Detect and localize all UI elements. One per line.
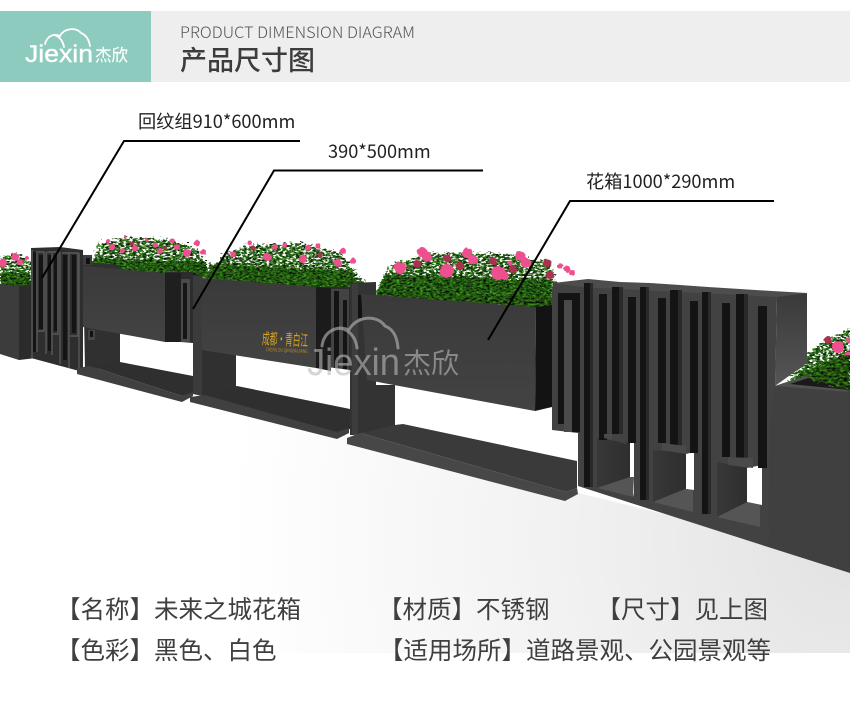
- fence end block: [775, 293, 807, 386]
- logo panel: 杰欣: [95, 42, 128, 66]
- planter 2 rear fence: [165, 272, 193, 345]
- floor shading: [0, 350, 850, 653]
- spec: usage: 【适用场所】道路景观、公园景观等: [379, 632, 771, 667]
- planter 4 box: [361, 294, 552, 411]
- product scene: planters and fence: [0, 236, 850, 573]
- header english title: PRODUCT DIMENSION DIAGRAM: [180, 19, 415, 43]
- product specifications: [56, 591, 771, 667]
- planter 3 box: [202, 278, 331, 371]
- fence top faces: [553, 279, 807, 298]
- right planter: [768, 376, 850, 573]
- callout: fence size: [42, 108, 300, 278]
- spec: colour: 【色彩】黑色、白色: [56, 632, 276, 667]
- right planter flowers: [812, 354, 850, 390]
- planter 4 post: [350, 282, 395, 435]
- post between planters 2 and 3: [193, 275, 202, 396]
- planter 3 leg and white gap: [202, 340, 350, 408]
- header: [0, 11, 850, 82]
- planter 3 gold sign: CHENG DU QINGBAIJIANG: [265, 346, 308, 355]
- fence openings: [597, 438, 762, 527]
- fence slot side faces: [590, 283, 748, 514]
- logo panel: Jiexin: [25, 41, 93, 68]
- callout: fence size: 回纹组910*600mm: [138, 108, 295, 134]
- planter 4 base: [347, 424, 578, 501]
- white gap under planter 4: [395, 386, 578, 462]
- fence body: [552, 283, 777, 547]
- fence hanging tabs: [564, 300, 753, 468]
- callout: planter size: [488, 168, 774, 340]
- planter 2 leg and white gap: [83, 262, 193, 376]
- right fence panel: [552, 279, 807, 547]
- spec: size: 【尺寸】见上图: [596, 591, 768, 626]
- planter 2 box: [83, 255, 181, 342]
- spec: material: 【材质】不锈钢: [378, 591, 550, 626]
- callout: upright size: [193, 138, 483, 309]
- callout: planter size: 花箱1000*290mm: [586, 168, 735, 194]
- flowers behind planters: [0, 236, 850, 398]
- logo panel: [0, 11, 151, 82]
- planter 3 fence section: [316, 287, 352, 378]
- left planter: [0, 284, 36, 360]
- planter 3 base: [190, 386, 350, 439]
- planter 2 base: [77, 362, 193, 402]
- planter 3 gold sign: [261, 327, 309, 355]
- watermark: [307, 318, 459, 384]
- left fence panel: [31, 247, 83, 372]
- spec: name: 【名称】未来之城花箱: [56, 591, 301, 626]
- planter 3 gold sign: 成都·青白江: [262, 327, 309, 351]
- watermark: 杰欣: [403, 342, 459, 382]
- watermark: Jiexin: [307, 342, 400, 384]
- callout: upright size: 390*500mm: [328, 138, 431, 164]
- header grey band: [151, 11, 850, 82]
- header chinese title: 产品尺寸图: [180, 39, 315, 78]
- fence slots: [558, 283, 767, 514]
